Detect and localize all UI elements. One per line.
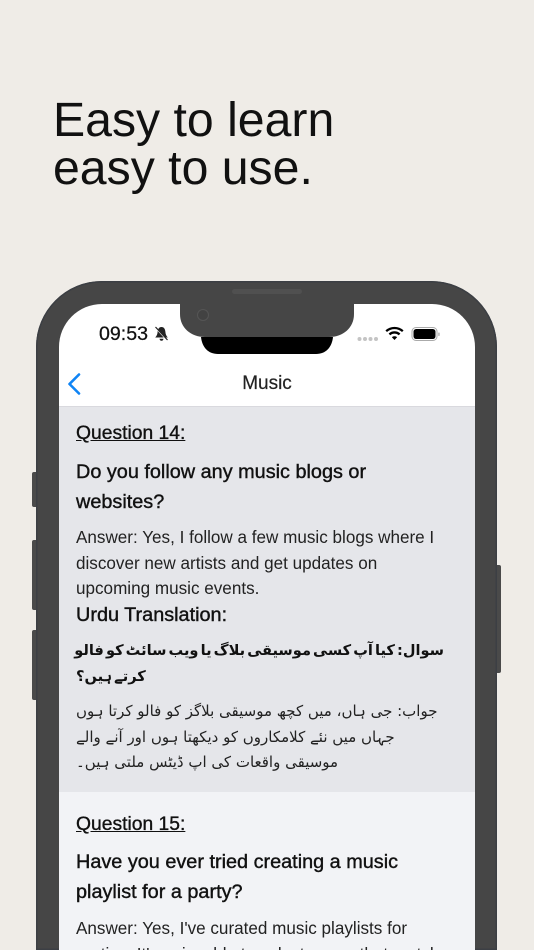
icon: wifi xyxy=(386,326,404,340)
urdu answer: جواب: جی ہاں، میں کچھ موسیقی بلاگز کو فالو کرتا ہوں xyxy=(76,702,438,720)
question 15 answer xyxy=(76,919,439,950)
title: Easy to learn xyxy=(53,93,334,147)
urdu answer: جہاں میں نئے کلامکاروں کو دیکھتا ہوں اور آنے والے xyxy=(76,728,395,746)
question 14 answer: discover new artists and get updates on xyxy=(76,554,377,572)
urdu answer xyxy=(76,702,438,771)
sensor pill xyxy=(201,337,333,354)
question 14 text xyxy=(76,461,366,513)
title xyxy=(53,93,334,195)
screen xyxy=(59,304,475,950)
title: easy to use. xyxy=(53,141,313,195)
screen title: Music: Music xyxy=(242,373,292,394)
icon: back chevron xyxy=(68,373,80,395)
question 15 heading: Question 15: xyxy=(76,814,185,835)
icon: signal dots xyxy=(358,337,378,341)
urdu answer: موسیقی واقعات کی اپ ڈیٹس ملتی ہیں۔ xyxy=(76,753,338,771)
question 14 text: websites? xyxy=(76,491,164,513)
notch xyxy=(180,304,354,354)
phone mockup xyxy=(32,281,501,950)
question 15 text: Have you ever tried creating a music xyxy=(76,851,398,873)
side button: mute xyxy=(32,472,38,507)
icon: battery xyxy=(412,327,440,341)
question 15 text xyxy=(76,851,398,903)
icon: muted bell xyxy=(155,326,168,341)
urdu question: سوال: کیا آپ کسی موسیقی بلاگ یا ویب سائٹ کو فالو xyxy=(74,642,444,659)
urdu question: کرتے ہیں؟ xyxy=(76,668,146,685)
urdu question xyxy=(74,641,444,685)
question 15 text: playlist for a party? xyxy=(76,881,243,903)
status bar time: 09:53 xyxy=(99,323,148,345)
phone body xyxy=(36,281,497,950)
side button: volume down xyxy=(32,630,38,700)
question 14 answer: upcoming music events. xyxy=(76,579,259,598)
panel: question 15 xyxy=(59,792,475,950)
question 14 answer xyxy=(76,528,434,598)
side button: power xyxy=(495,565,501,673)
question 14 text: Do you follow any music blogs or xyxy=(76,461,366,483)
notch bezel xyxy=(180,304,354,337)
question 14 answer: Answer: Yes, I follow a few music blogs where I xyxy=(76,528,434,547)
navigation bar divider xyxy=(59,406,475,407)
speaker grille xyxy=(232,289,302,294)
question 15 answer: Answer: Yes, I've curated music playlists for xyxy=(76,919,407,938)
front camera xyxy=(198,310,208,320)
side button: volume up xyxy=(32,540,38,610)
question 14 heading: Question 14: xyxy=(76,423,185,444)
panel: question 14 xyxy=(59,407,475,792)
urdu translation heading: Urdu Translation: xyxy=(76,604,227,626)
